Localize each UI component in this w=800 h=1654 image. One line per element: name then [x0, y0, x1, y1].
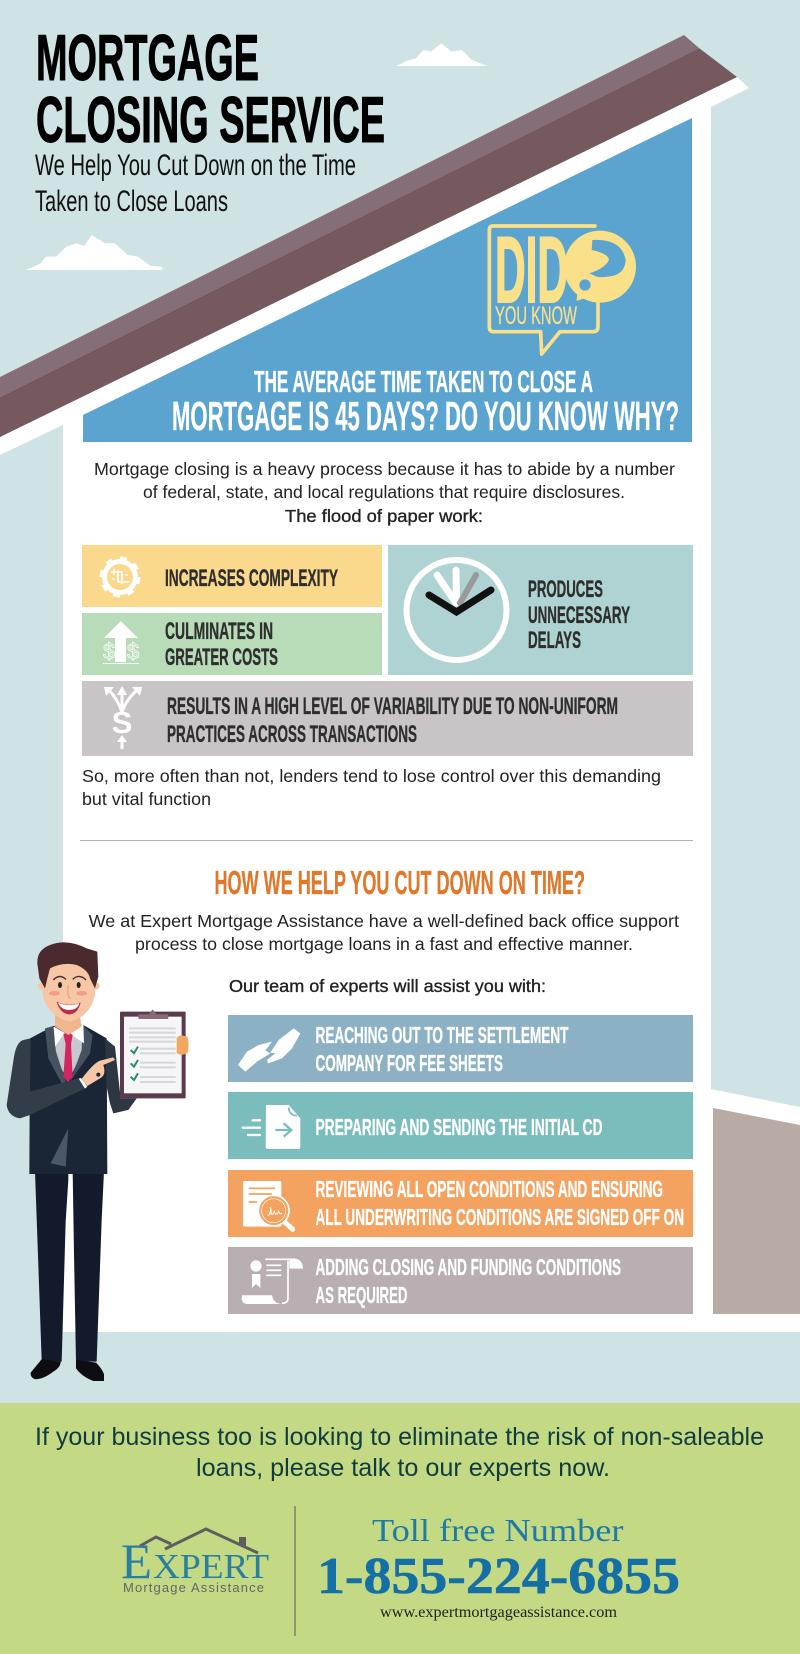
panel: increases complexity — [82, 545, 382, 607]
house wall — [0, 77, 800, 1332]
icon: document send — [243, 1105, 300, 1149]
panel: increases complexity: INCREASES COMPLEXITY — [165, 565, 338, 592]
pointing hand — [81, 1057, 115, 1086]
icon: did you know bubble — [489, 217, 636, 354]
far sleeve — [105, 1038, 137, 1113]
intro text: The flood of paper work: — [285, 506, 483, 526]
title: MORTGAGE — [36, 21, 259, 94]
icon: did you know bubble: DID — [495, 217, 568, 322]
tie — [63, 1032, 73, 1082]
panel: unnecessary delays: DELAYS — [528, 627, 581, 654]
icon: cloud top — [396, 43, 487, 66]
call to action text: loans, please talk to our experts now. — [196, 1454, 610, 1482]
closing note text: but vital function — [82, 789, 211, 809]
step: funding conditions: AS REQUIRED — [316, 1282, 408, 1308]
shirt cuff — [79, 1078, 87, 1089]
step: initial cd — [228, 1092, 693, 1159]
logo: expert mortgage assistance: XPERT — [153, 1547, 269, 1586]
hair — [37, 942, 98, 988]
icon: cloud left — [27, 235, 162, 270]
icon: up arrow with dollars: $ — [103, 639, 115, 664]
section intro text: Our team of experts will assist you with: — [229, 976, 546, 996]
icon: split arrows and dollar — [104, 686, 142, 749]
icon: scroll and ribbon — [242, 1258, 303, 1304]
step: funding conditions — [228, 1247, 693, 1314]
icon: document magnifier — [243, 1181, 293, 1229]
subtitle — [35, 149, 356, 218]
closing note text — [82, 766, 661, 809]
panel: unnecessary delays — [388, 545, 693, 675]
footer band — [0, 1403, 800, 1654]
call to action text — [35, 1423, 764, 1482]
jacket — [29, 1025, 107, 1174]
section intro text: process to close mortgage loans in a fast and effective manner. — [135, 934, 633, 954]
section intro text — [89, 911, 679, 996]
near sleeve — [7, 1038, 85, 1118]
blue panel headline — [172, 364, 679, 439]
step: open conditions — [228, 1170, 693, 1237]
toll free number label: Toll free Number — [372, 1512, 624, 1548]
shoes — [31, 1359, 104, 1381]
step: settlement company — [228, 1015, 693, 1082]
title — [36, 21, 385, 156]
icon: split arrows and dollar: S — [112, 705, 132, 740]
illustration: businessman with clipboard — [7, 942, 189, 1381]
title: CLOSING SERVICE — [36, 83, 385, 156]
logo: expert mortgage assistance: Mortgage Assistance — [123, 1580, 264, 1595]
closing note text: So, more often than not, lenders tend to lose control over this demanding — [82, 766, 661, 786]
subtitle: We Help You Cut Down on the Time — [35, 149, 356, 182]
panel: greater costs: CULMINATES IN — [165, 618, 273, 645]
shirt and collar — [53, 1024, 84, 1082]
intro text — [94, 459, 675, 526]
call to action text: If your business too is looking to eliminate the risk of non-saleable — [35, 1423, 764, 1451]
website: www.expertmortgageassistance.com — [380, 1604, 618, 1621]
subtitle: Taken to Close Loans — [35, 185, 228, 218]
icon: did you know bubble: YOU KNOW — [495, 302, 577, 330]
panel: unnecessary delays: UNNECESSARY — [528, 602, 630, 629]
roof — [0, 35, 737, 437]
neighbouring house block — [713, 1108, 800, 1314]
icon: hands — [238, 1028, 300, 1072]
panel: did you know — [83, 118, 692, 442]
step: settlement company: REACHING OUT TO THE SETTLEMENT — [316, 1022, 569, 1048]
intro text: Mortgage closing is a heavy process because it has to abide by a number — [94, 459, 675, 479]
icon: gear — [101, 558, 139, 596]
step: settlement company: COMPANY FOR FEE SHEETS — [316, 1050, 503, 1076]
phone number: 1-855-224-6855 — [317, 1548, 680, 1605]
intro text: of federal, state, and local regulations that require disclosures. — [143, 482, 625, 502]
icon: clock — [406, 560, 506, 660]
step: initial cd: PREPARING AND SENDING THE INITIAL CD — [316, 1114, 602, 1140]
clipboard — [120, 1009, 189, 1098]
neck and head — [55, 1015, 82, 1035]
trousers — [35, 1172, 104, 1362]
icon: up arrow with dollars: $ — [127, 639, 139, 664]
logo: expert mortgage assistance: E — [121, 1533, 152, 1589]
panel: greater costs: GREATER COSTS — [165, 644, 278, 671]
logo: expert mortgage assistance — [121, 1529, 269, 1595]
panel: greater costs — [82, 613, 382, 675]
panel: unnecessary delays: PRODUCES — [528, 576, 603, 603]
panel: variability — [82, 681, 693, 756]
section intro text: We at Expert Mortgage Assistance have a well-defined back office support — [89, 911, 679, 931]
panel: variability: PRACTICES ACROSS TRANSACTIONS — [167, 721, 417, 748]
icon: up arrow with dollars — [103, 621, 139, 664]
